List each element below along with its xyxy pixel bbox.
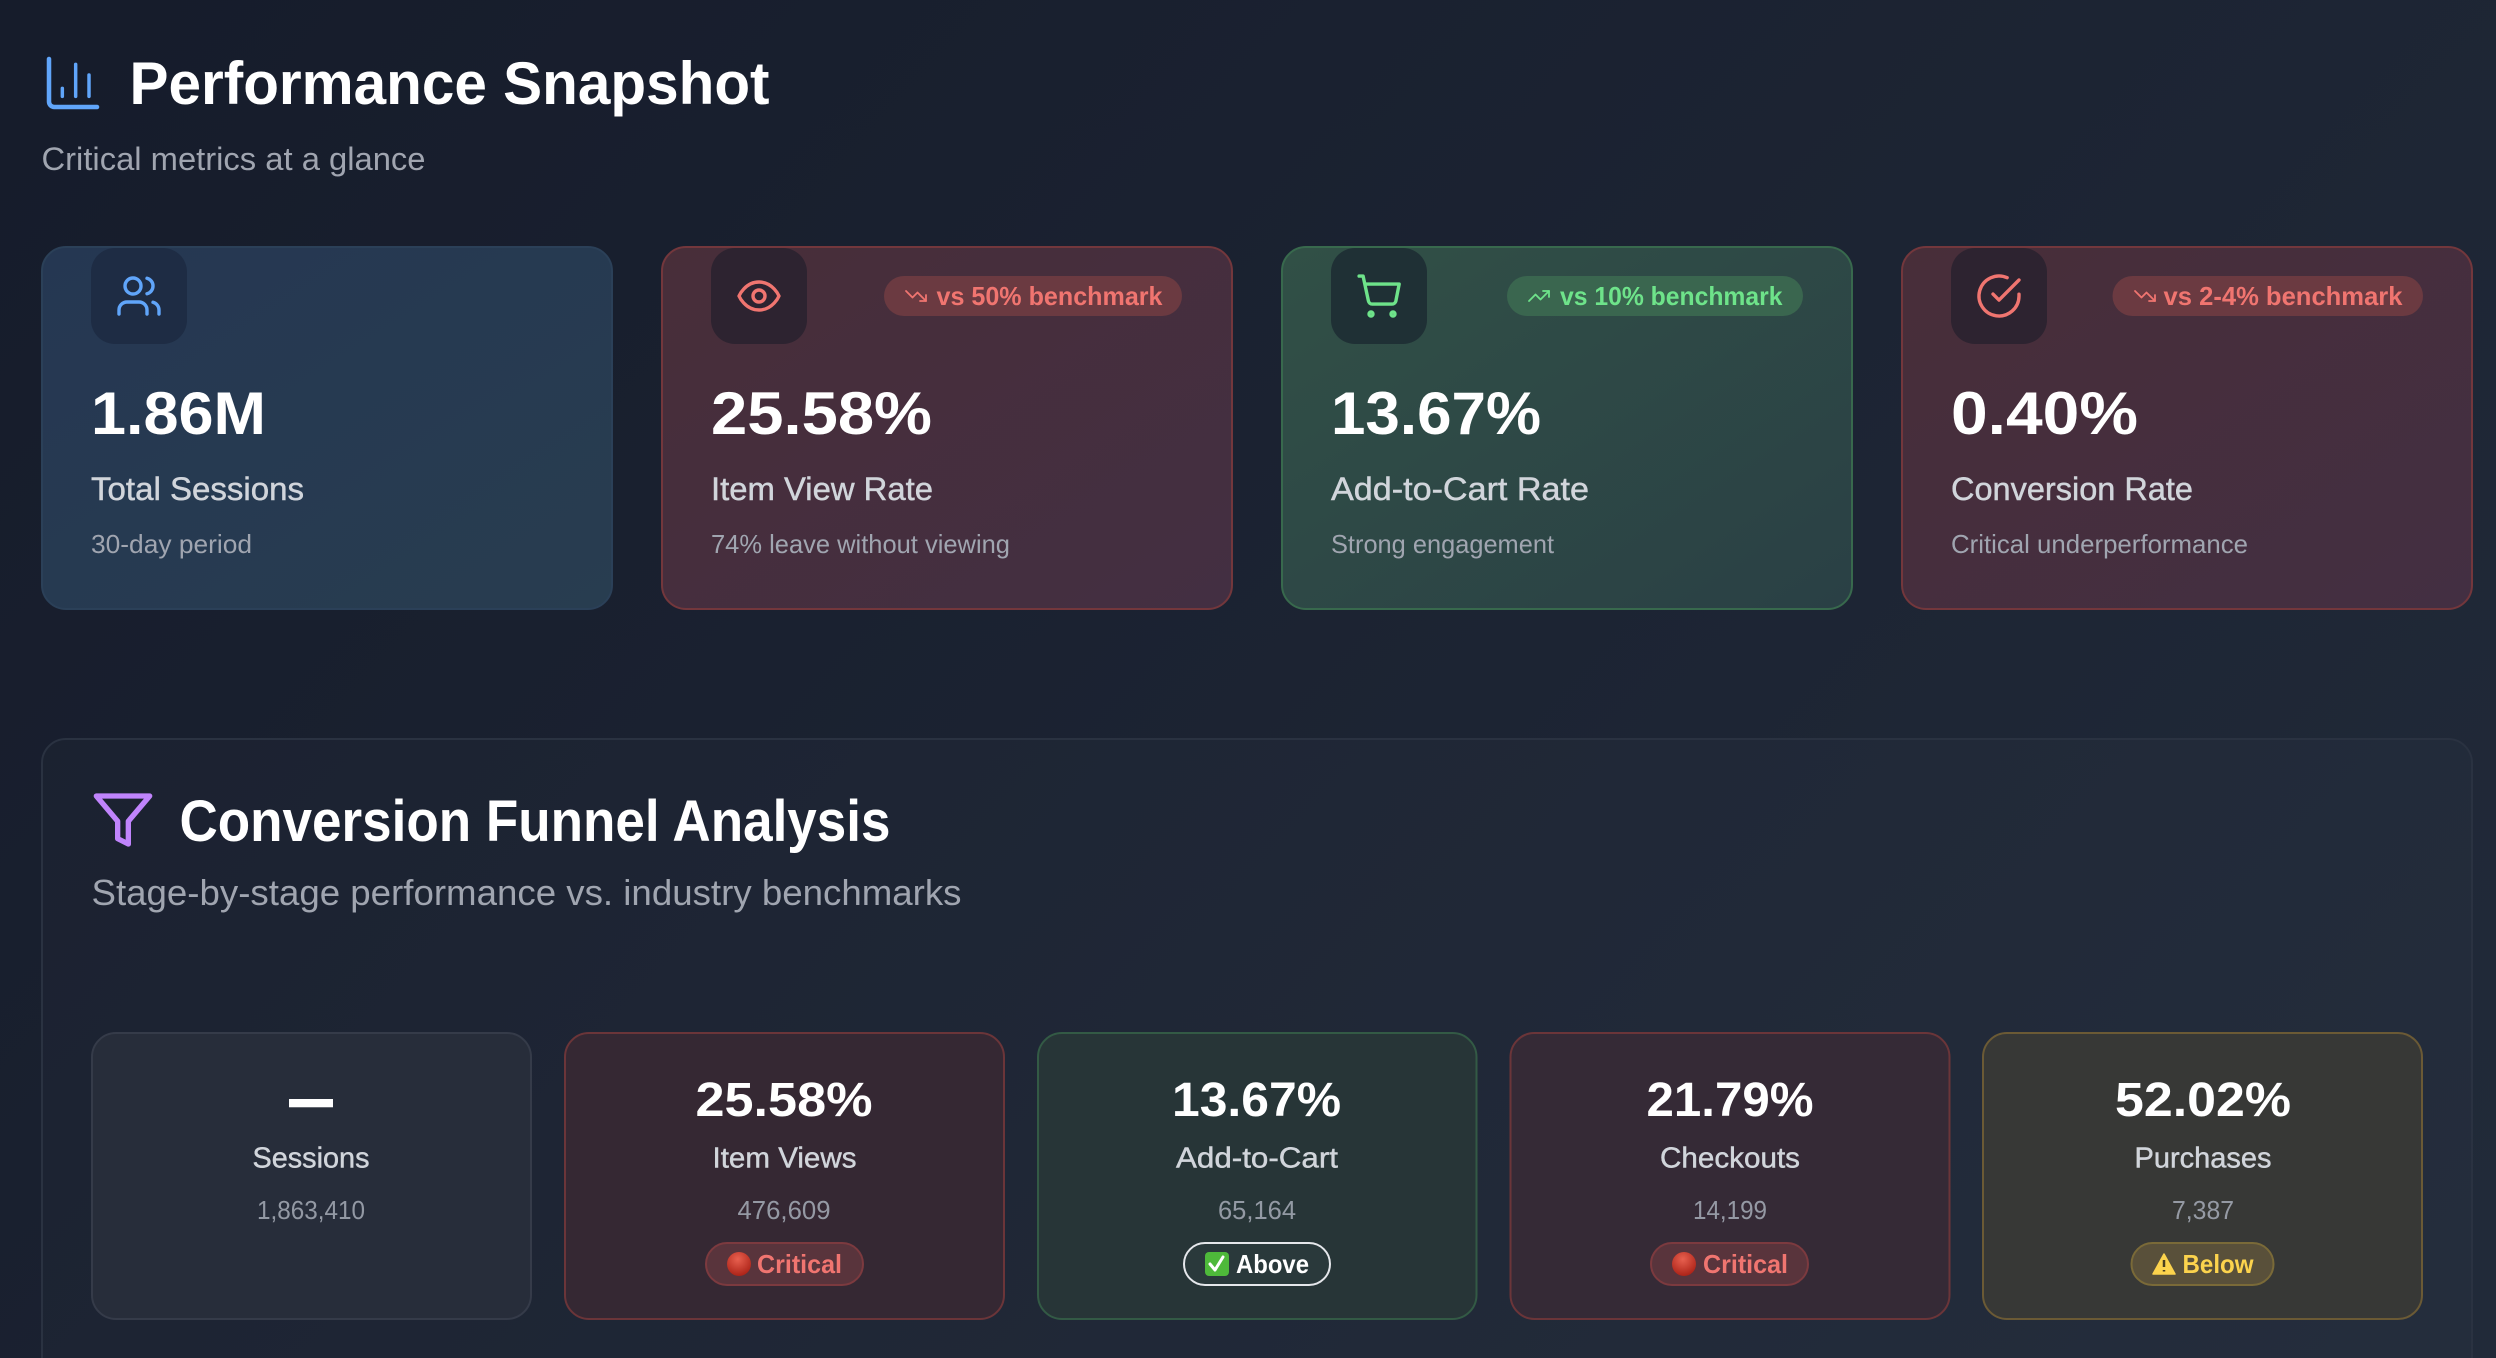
funnel stage: sessions [92, 1033, 531, 1319]
status: below: Below [2182, 1251, 2254, 1279]
badge: vs 50% benchmark [884, 276, 1182, 316]
funnel stage: add-to-cart [1038, 1033, 1476, 1319]
title: Performance Snapshot [130, 50, 770, 117]
header: performance snapshot [42, 50, 770, 177]
label: Purchases [2134, 1142, 2272, 1174]
label: Add-to-Cart [1176, 1142, 1338, 1174]
icon: cart [1331, 248, 1427, 344]
metric card: total sessions [42, 247, 612, 609]
note: 74% leave without viewing [711, 531, 1010, 559]
count: 476,609 [738, 1197, 830, 1225]
value: 0.40% [1951, 380, 2138, 447]
icon: users [91, 248, 187, 344]
value: 25.58% [711, 380, 932, 447]
count: 7,387 [2172, 1197, 2234, 1225]
status: critical [1651, 1243, 1808, 1285]
value: 25.58% [696, 1074, 872, 1127]
badge: vs 10% benchmark: vs 10% benchmark [1560, 283, 1783, 311]
panel heading: Conversion Funnel Analysis [180, 789, 890, 854]
metric card: item view rate [662, 247, 1232, 609]
badge: vs 50% benchmark: vs 50% benchmark [936, 283, 1163, 311]
value: 21.79% [1646, 1074, 1814, 1127]
icon: bar chart [49, 59, 97, 107]
status: above: Above [1236, 1251, 1309, 1279]
subtitle: Critical metrics at a glance [42, 141, 426, 177]
icon: check circle [1951, 248, 2047, 344]
value: 13.67% [1331, 380, 1541, 447]
label: Checkouts [1660, 1142, 1800, 1174]
status: critical [706, 1243, 863, 1285]
label: Item View Rate [711, 471, 933, 507]
metric card: add-to-cart rate [1282, 247, 1852, 609]
status: critical: Critical [1703, 1251, 1788, 1279]
metric card: conversion rate [1902, 247, 2472, 609]
icon: funnel [96, 796, 150, 844]
funnel stage: item views [565, 1033, 1004, 1319]
icon: eye [711, 248, 807, 344]
note: 30-day period [91, 531, 252, 559]
note: Critical underperformance [1951, 531, 2248, 559]
count: 65,164 [1218, 1197, 1296, 1225]
count: 14,199 [1693, 1197, 1767, 1225]
value: — [290, 1074, 332, 1127]
funnel stage: purchases [1983, 1033, 2422, 1319]
status: above [1184, 1243, 1330, 1285]
label: Sessions [252, 1142, 370, 1174]
status: below [2132, 1243, 2274, 1285]
panel subtitle: Stage-by-stage performance vs. industry benchmarks [92, 872, 962, 913]
value: 13.67% [1172, 1074, 1341, 1127]
badge: vs 2-4% benchmark: vs 2-4% benchmark [2164, 283, 2403, 311]
panel: conversion funnel analysis [42, 739, 2472, 1358]
label: Conversion Rate [1951, 471, 2193, 507]
note: Strong engagement [1331, 531, 1554, 559]
funnel stage: checkouts [1510, 1033, 1950, 1319]
label: Item Views [712, 1142, 856, 1174]
label: Total Sessions [91, 471, 304, 507]
status: critical: Critical [757, 1251, 842, 1279]
value: 52.02% [2115, 1074, 2291, 1127]
label: Add-to-Cart Rate [1331, 471, 1589, 507]
badge: vs 10% benchmark [1507, 276, 1803, 316]
value: 1.86M [91, 380, 266, 447]
badge: vs 2-4% benchmark [2112, 276, 2423, 316]
count: 1,863,410 [257, 1197, 365, 1225]
